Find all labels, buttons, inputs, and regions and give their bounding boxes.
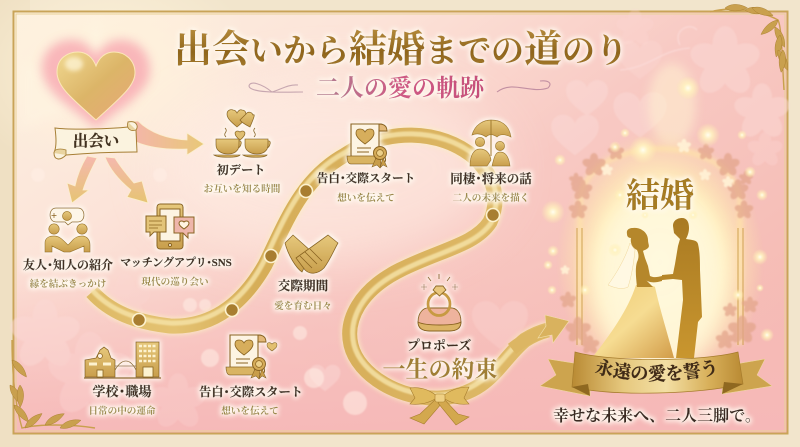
- icon: couple under umbrella: [470, 120, 511, 166]
- icon: certificate with hearts: [226, 335, 277, 379]
- icon: hearts and coffee cups: [214, 110, 270, 157]
- step: friends introduction: 友人・知人の紹介: [23, 257, 113, 272]
- step: matching apps: [120, 204, 232, 288]
- icon: school, bridge and office: [84, 342, 161, 378]
- banner: eternal vow: 永遠の愛を誓う: [594, 358, 714, 382]
- step: matching apps: マッチングアプリ・SNS: [120, 255, 232, 269]
- sparkles: [541, 76, 774, 342]
- step: matching apps: 現代の巡り会い: [141, 276, 209, 288]
- icon: handshake people with speech bubble: [45, 208, 90, 252]
- bride upper body: [627, 228, 662, 287]
- step: proposal: 一生の約束: [382, 357, 498, 382]
- icon: diamond ring on cushion: [418, 274, 461, 331]
- heading: wedding: 結婚: [626, 177, 694, 215]
- step: dating period: 交際期間: [278, 278, 328, 293]
- path markers: [132, 184, 500, 326]
- subtitle with flourishes: 二人の愛の軌跡: [316, 75, 486, 102]
- step: proposal: プロポーズ: [407, 338, 471, 353]
- step: school and work: 学校・職場: [92, 384, 152, 399]
- step: school and work: 日常の中の運命: [88, 405, 156, 417]
- icon: phone with chat bubbles: [146, 204, 194, 249]
- arrow: to first date: [128, 121, 204, 155]
- gold ribbon path: [92, 134, 548, 398]
- groom: [662, 218, 702, 358]
- title: 出会いから結婚までの道のり: [174, 29, 628, 71]
- step: first date: 初デート: [217, 162, 265, 177]
- step: confession upper: 想いを伝えて: [337, 192, 395, 204]
- golden heart: [42, 40, 150, 128]
- icon: certificate: [347, 124, 387, 168]
- couple silhouette: [592, 218, 702, 358]
- step: dating period: 愛を育む日々: [274, 300, 332, 312]
- wedding arch: [556, 130, 764, 394]
- bride dress: [592, 285, 674, 358]
- step: proposal: [382, 274, 498, 382]
- step: friends introduction: [23, 208, 113, 290]
- arrow: to matching apps: [105, 157, 148, 203]
- scroll: deai: [54, 122, 137, 159]
- step: confession upper: [317, 124, 415, 204]
- scroll: deai: 出会い: [73, 131, 119, 150]
- step: first date: [204, 110, 281, 195]
- icon: handshake: [285, 235, 338, 273]
- arrow: to friends: [67, 156, 97, 203]
- step: friends introduction: 縁を結ぶきっかけ: [30, 278, 106, 290]
- step: school and work: [84, 342, 161, 417]
- step: dating period: [274, 235, 338, 312]
- step: first date: お互いを知る時間: [204, 183, 281, 195]
- bride veil: [608, 243, 635, 288]
- corner ornament: bottom left leaves: [9, 340, 95, 429]
- gold bow: [410, 387, 469, 425]
- step: living together: 同棲・将来の話: [450, 171, 532, 186]
- closing message: 幸せな未来へ、二人三脚で。: [553, 406, 761, 425]
- step: confession lower: 告白・交際スタート: [199, 384, 303, 399]
- step: confession upper: 告白・交際スタート: [317, 171, 415, 185]
- step: confession lower: 想いを伝えて: [221, 405, 279, 417]
- banner: eternal vow: [540, 352, 772, 396]
- subtitle with flourishes: [249, 75, 550, 102]
- step: living together: [450, 120, 532, 204]
- corner ornament: top right leaves: [710, 2, 789, 90]
- step: living together: 二人の未来を描く: [453, 192, 529, 204]
- arrow: ribbon tail into wedding: [512, 315, 569, 349]
- step: confession lower: [199, 335, 303, 417]
